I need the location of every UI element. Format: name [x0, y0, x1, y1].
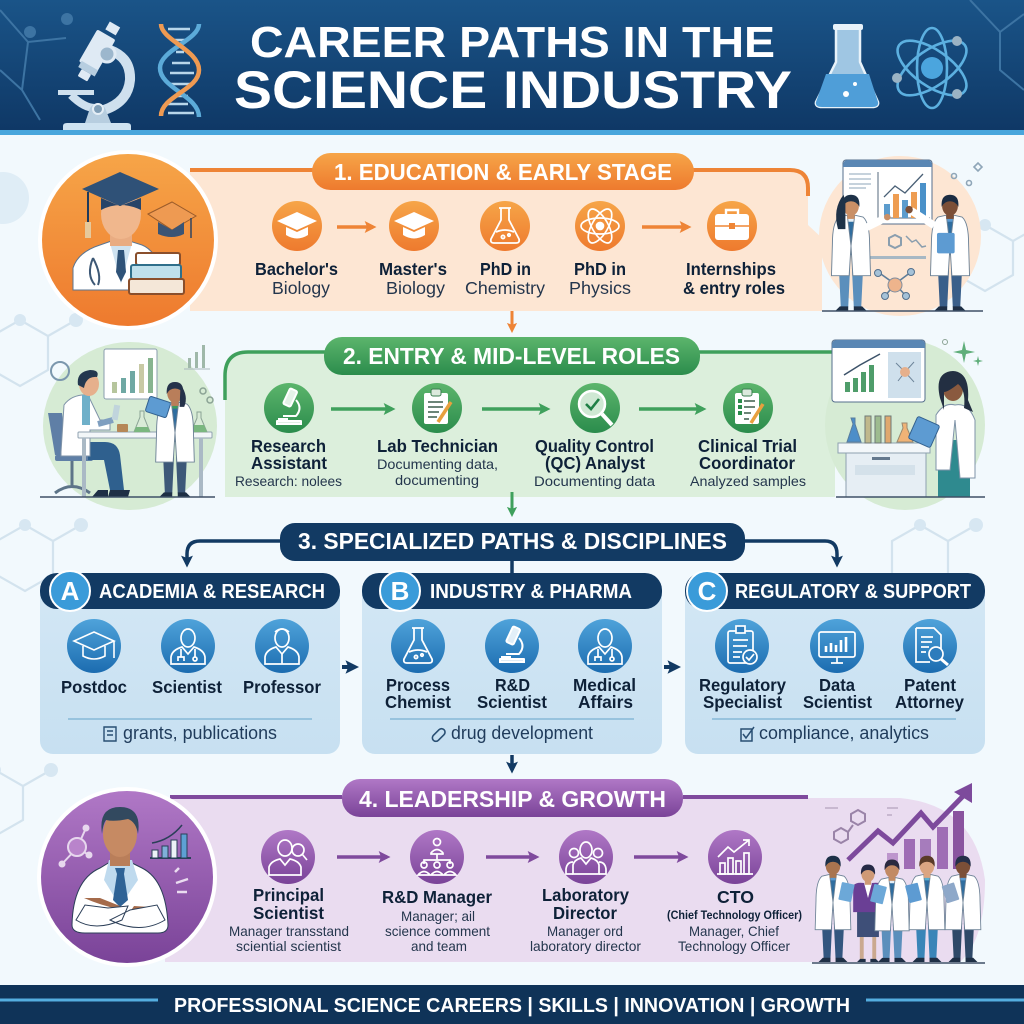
arrow — [337, 225, 373, 229]
step: lab technician: Documenting data, — [377, 456, 498, 472]
step: laboratory director: Laboratory — [542, 885, 629, 905]
step: research assistant: Research: nolees — [235, 473, 342, 489]
step: cto: Technology Officer — [678, 938, 790, 954]
card C: regulatory and support: compliance, analytics — [759, 723, 929, 743]
step: phd in chemistry: PhD in — [480, 259, 531, 279]
step: quality control analyst — [534, 383, 655, 489]
step: cto: Manager, Chief — [689, 923, 779, 939]
card B: industry and pharma — [362, 571, 662, 754]
card B: industry and pharma: Medical — [573, 675, 636, 695]
step: laboratory director — [530, 830, 641, 954]
badge C — [687, 571, 727, 611]
card C: regulatory and support: REGULATORY & SUPPORT — [735, 580, 971, 603]
panel background — [190, 170, 822, 311]
step: research assistant: Research — [251, 436, 326, 456]
card B: industry and pharma: Chemist — [385, 692, 451, 712]
step: bachelor's biology: Biology — [272, 278, 330, 298]
arrow — [337, 855, 387, 859]
step: r&d manager — [382, 830, 492, 954]
arrow — [664, 665, 677, 669]
step: quality control analyst: Documenting data — [534, 473, 655, 489]
step: phd in physics — [569, 201, 631, 298]
step: master's biology — [379, 201, 447, 298]
arrow: specialized to leadership — [510, 755, 514, 770]
heading pill — [342, 779, 683, 817]
step: r&d manager: R&D Manager — [382, 887, 492, 907]
step: internships and entry roles: & entry roles — [683, 278, 785, 298]
step: phd in physics: Physics — [569, 278, 631, 298]
connector arrows — [187, 541, 837, 574]
step: phd in chemistry: Chemistry — [465, 278, 545, 298]
step: phd in chemistry — [465, 201, 545, 298]
card A: academia and research: Scientist — [152, 677, 222, 697]
portrait: graduate — [38, 150, 218, 330]
arrow: entry to specialized — [510, 492, 514, 514]
step: r&d manager: Manager; ail — [401, 908, 475, 924]
portrait: leader — [37, 787, 217, 967]
step: cto: CTO — [717, 887, 754, 907]
illustration: scientists at whiteboard — [819, 156, 983, 316]
card B: industry and pharma: Scientist — [477, 692, 547, 712]
card C: regulatory and support: Patent — [904, 675, 956, 695]
card C: regulatory and support: Specialist — [703, 692, 782, 712]
step: lab technician — [377, 383, 498, 488]
step: laboratory director: Manager ord — [547, 923, 623, 939]
card A: academia and research: ACADEMIA & RESEARCH — [99, 580, 325, 603]
step: internships and entry roles: Internships — [686, 259, 776, 279]
card C: regulatory and support: Scientist — [803, 692, 872, 712]
step: clinical trial coordinator: Clinical Trial — [698, 436, 797, 456]
illustration: team and growth chart — [812, 783, 985, 963]
badge C: C — [698, 576, 717, 606]
heading pill: 4. LEADERSHIP & GROWTH — [359, 786, 666, 812]
step: internships and entry roles — [683, 201, 785, 298]
badge A: A — [61, 576, 80, 606]
card C: regulatory and support: Regulatory — [699, 675, 786, 695]
step: bachelor's biology: Bachelor's — [255, 259, 338, 279]
heading pill: 2. ENTRY & MID-LEVEL ROLES — [343, 343, 680, 369]
step: principal scientist: sciential scientist — [236, 938, 341, 954]
step: principal scientist: Principal — [253, 885, 324, 905]
step: lab technician: documenting — [395, 472, 479, 488]
card B: industry and pharma: R&D — [495, 675, 530, 695]
card A: academia and research: Postdoc — [61, 677, 127, 697]
arrow — [639, 407, 703, 411]
step: laboratory director: Director — [553, 903, 617, 923]
card B: industry and pharma: Affairs — [578, 692, 633, 712]
icon: microscope — [58, 22, 131, 130]
step: clinical trial coordinator — [690, 383, 806, 489]
icon: atom — [889, 28, 975, 108]
step: master's biology: Master's — [379, 259, 447, 279]
illustration: lab bench — [40, 342, 217, 510]
step: r&d manager: science comment — [385, 923, 490, 939]
step: lab technician: Lab Technician — [377, 436, 498, 456]
step: principal scientist: Manager transstand — [229, 923, 349, 939]
card B: industry and pharma: INDUSTRY & PHARMA — [430, 580, 632, 603]
step: phd in physics: PhD in — [574, 259, 626, 279]
icon: dna helix — [160, 24, 199, 117]
step: laboratory director: laboratory director — [530, 938, 641, 954]
arrow — [642, 225, 688, 229]
panel background — [225, 352, 835, 497]
note icon: capsule — [431, 727, 446, 743]
card C: regulatory and support: Attorney — [895, 692, 964, 712]
icon: flask — [816, 24, 878, 107]
badge B — [380, 571, 420, 611]
arrow — [331, 407, 392, 411]
footer banner — [0, 985, 1024, 1024]
title: CAREER PATHS IN THE — [250, 18, 775, 67]
header banner — [0, 0, 1024, 135]
badge B: B — [391, 576, 409, 606]
card B: industry and pharma: Process — [386, 675, 450, 695]
step: bachelor's biology — [255, 201, 338, 298]
heading pill: 3. SPECIALIZED PATHS & DISCIPLINES — [298, 528, 727, 554]
step: research assistant — [235, 383, 342, 489]
arrow — [486, 855, 536, 859]
title — [234, 18, 792, 120]
panel: specialized paths and disciplines — [40, 523, 985, 754]
panel background — [165, 798, 985, 962]
step: quality control analyst: Quality Control — [535, 436, 654, 456]
arrow — [482, 407, 547, 411]
card A: academia and research: grants, publications — [123, 723, 277, 743]
footer banner: PROFESSIONAL SCIENCE CAREERS | SKILLS | INNOVATION | GROWTH — [174, 995, 850, 1017]
note icon: checkbox — [741, 727, 754, 741]
step: research assistant: Assistant — [251, 453, 327, 473]
heading pill — [280, 523, 745, 561]
step: master's biology: Biology — [386, 278, 445, 298]
panel: entry and mid-level roles — [40, 337, 985, 510]
step: clinical trial coordinator: Coordinator — [699, 453, 795, 473]
badge A — [50, 571, 90, 611]
card C: regulatory and support: Data — [819, 675, 855, 695]
illustration: analyst with board — [825, 340, 985, 510]
card A: academia and research — [40, 571, 340, 754]
arrow — [342, 665, 355, 669]
step: r&d manager: and team — [411, 938, 467, 954]
heading pill: 1. EDUCATION & EARLY STAGE — [334, 159, 672, 185]
card B: industry and pharma: drug development — [451, 723, 593, 743]
note icon: document — [104, 727, 116, 741]
step: principal scientist — [229, 830, 349, 954]
panel: education and early stage — [38, 150, 983, 330]
step: clinical trial coordinator: Analyzed samples — [690, 473, 806, 489]
arrow: education to entry — [510, 311, 514, 330]
heading pill — [324, 337, 700, 375]
card C: regulatory and support — [685, 571, 985, 754]
arrow — [634, 855, 685, 859]
title: SCIENCE INDUSTRY — [234, 61, 792, 120]
step: cto — [667, 830, 802, 954]
card A: academia and research: Professor — [243, 677, 321, 697]
step: cto: (Chief Technology Officer) — [667, 910, 802, 922]
step: quality control analyst: (QC) Analyst — [545, 453, 645, 473]
panel: leadership and growth — [37, 779, 985, 967]
heading pill — [312, 153, 694, 190]
step: principal scientist: Scientist — [253, 903, 324, 923]
